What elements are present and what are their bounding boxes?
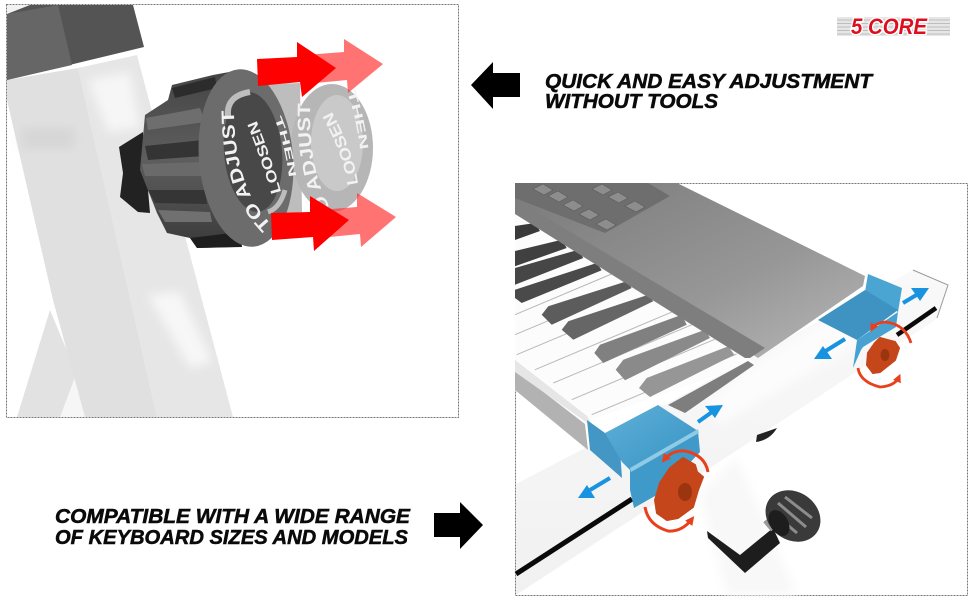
knob: THEN	[276, 115, 296, 176]
left knob hole	[678, 483, 692, 501]
arrows: red upper and lower movement	[257, 42, 349, 251]
right knob hole	[880, 349, 890, 361]
keyboard white keys	[515, 212, 754, 427]
logo: 5 Core: 5 CORE	[851, 14, 928, 39]
keyboard front lip	[515, 370, 588, 450]
knob: LOOSEN	[248, 121, 281, 194]
right slide arrows	[814, 288, 929, 359]
left clamp	[587, 405, 700, 508]
heading: quick and easy adjustment	[545, 70, 873, 113]
right rotate arrows	[858, 322, 911, 387]
arrow: pointing right to keyboard photo	[434, 502, 483, 549]
ghost knob position: LOOSEN	[322, 112, 358, 185]
stand legs	[7, 55, 233, 417]
left knob	[655, 458, 703, 520]
ghost knob position	[268, 83, 373, 213]
panel: knob adjustment photo	[6, 4, 459, 418]
panel: keyboard on stand photo	[515, 183, 968, 596]
heading: quick and easy adjustment: WITHOUT TOOLS	[545, 90, 718, 113]
stand top block	[7, 5, 144, 80]
keyboard black keys	[515, 223, 754, 413]
knob	[119, 69, 296, 248]
left rotate arrows	[645, 451, 708, 531]
ghost knob position: TO ADJUST	[298, 104, 328, 207]
stand leg and rail	[516, 270, 948, 595]
right clamp	[818, 274, 902, 368]
heading: compatible with keyboard sizes	[55, 505, 411, 549]
heading: compatible with keyboard sizes: COMPATIBLE WITH A WIDE RANGE	[55, 505, 411, 528]
heading: compatible with keyboard sizes: OF KEYBOARD SIZES AND MODELS	[55, 526, 408, 549]
arrows: faded upper and lower movement	[305, 39, 396, 247]
keyboard top panel	[515, 183, 865, 358]
left slide arrows	[578, 405, 723, 498]
ghost knob position: THEN	[348, 90, 368, 148]
arrow: pointing left to knob photo	[471, 62, 520, 109]
detached clamp with black knob	[707, 480, 831, 573]
right knob	[867, 338, 899, 373]
knob: TO ADJUST	[222, 110, 268, 234]
heading: quick and easy adjustment: QUICK AND EASY ADJUSTMENT	[545, 70, 873, 93]
